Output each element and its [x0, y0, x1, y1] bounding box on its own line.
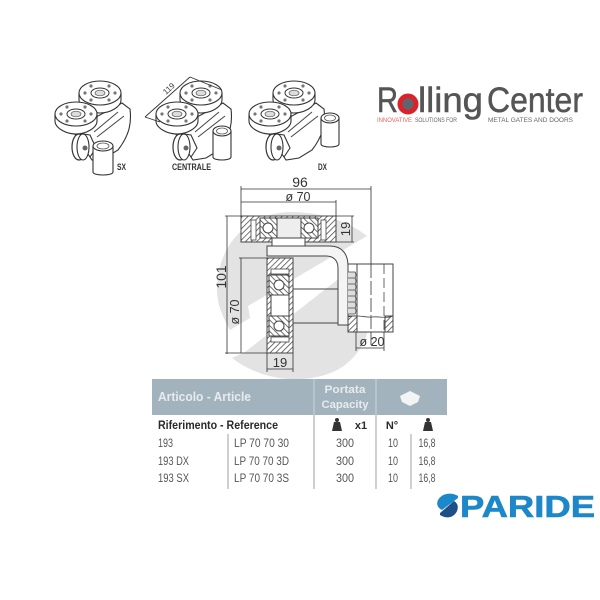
row: 193 DX: 193 DX: [158, 456, 189, 468]
post of DX caster: [321, 113, 339, 147]
dimension: side diameter 70: [228, 258, 267, 353]
logo mark: [437, 494, 458, 517]
row: 193 SX: 10: [388, 473, 398, 485]
lower wheel: [267, 258, 293, 353]
dimension: post diameter 20: [356, 332, 385, 351]
post of SX caster: [93, 141, 113, 175]
watermark: grey circular logo: [217, 212, 368, 379]
row: 193 SX: 300: [336, 473, 354, 485]
icon: box: [400, 391, 420, 406]
logo: Rolling Center: R: [377, 81, 398, 120]
row: 193 DX: LP 70 70 3D: [234, 456, 289, 468]
header column dividers: [314, 379, 376, 415]
subheader: Riferimento - Reference: Riferimento - Reference: [158, 420, 278, 432]
logo: Rolling Center: Center: [487, 81, 583, 120]
dimension: 96: 96: [292, 174, 308, 190]
dimension: 119 skew line on CENTRALE: [145, 77, 222, 122]
dimension: lower wheel width 19: [267, 353, 293, 372]
threaded post: [348, 264, 393, 332]
dimension: top diameter 70: ø 70: [285, 190, 311, 204]
table: article data: [152, 379, 447, 489]
row: 193: 10: [388, 438, 398, 450]
dimension: lower wheel width 19: 19: [273, 355, 287, 370]
row: 193 DX: 16,8: [418, 456, 436, 468]
logo: Paride: PARIDE: [460, 489, 595, 524]
header: Articolo - Article: Articolo - Article: [158, 390, 251, 404]
label: SX: SX: [117, 162, 126, 172]
header: Portata Capacity: [322, 384, 369, 411]
bracket: [267, 246, 348, 325]
label: DX: DX: [318, 162, 327, 172]
logo: Rolling Center: INNOVATIVE: [377, 118, 412, 124]
row: 193: [158, 438, 436, 450]
row: 193: 193: [158, 438, 173, 450]
top wheel: [241, 216, 336, 246]
logo: Rolling Center: SOLUTIONS FOR: [415, 118, 458, 124]
dimension: post diameter 20: ø 20: [359, 335, 385, 349]
post of CENTRALE caster: [213, 126, 231, 160]
icon: caster variant DX: [249, 81, 339, 160]
label: CENTRALE: CENTRALE: [172, 162, 211, 172]
row: 193: 300: [336, 438, 354, 450]
logo: Rolling Center: [377, 81, 583, 124]
dimension: 101: 101: [213, 265, 229, 289]
dimension: 101: [213, 216, 267, 354]
logo: Rolling Center: lling: [418, 81, 483, 120]
header: Portata Capacity: Portata: [324, 384, 366, 396]
logo ring: [400, 96, 416, 112]
dimension: top wheel width 19: [336, 216, 354, 242]
table header band: [152, 379, 447, 415]
dimension: 96: [241, 174, 371, 345]
row: 193 SX: [158, 473, 436, 485]
dimension: 119 skew line on CENTRALE: 119: [161, 81, 177, 96]
dimension: top diameter 70: [241, 190, 336, 216]
row: 193 SX: 193 SX: [158, 473, 189, 485]
dimension: side diameter 70: ø 70: [228, 299, 242, 325]
table column dividers: [228, 415, 411, 489]
icon: caster variant SX: [55, 81, 130, 175]
header: Portata Capacity: Capacity: [322, 399, 369, 411]
row: 193 SX: 16,8: [418, 473, 436, 485]
arm to lower wheel: [289, 289, 338, 323]
icon: weight capacity: [332, 418, 342, 431]
row: 193: 16,8: [418, 438, 436, 450]
label: x1: x1: [355, 420, 367, 432]
row: 193 DX: [158, 456, 436, 468]
logo: Rolling Center: METAL GATES AND DOORS: [488, 118, 573, 124]
row: 193: LP 70 70 30: [234, 438, 289, 450]
row: 193 SX: LP 70 70 3S: [234, 473, 289, 485]
row: 193 DX: 300: [336, 456, 354, 468]
row: 193 DX: 10: [388, 456, 398, 468]
technical drawing: section view: [241, 216, 393, 353]
icon: weight per box: [423, 418, 433, 431]
icon: caster variant CENTRALE: [156, 81, 232, 160]
dimension: top wheel width 19: 19: [338, 222, 353, 236]
label: N°: N°: [386, 420, 398, 432]
